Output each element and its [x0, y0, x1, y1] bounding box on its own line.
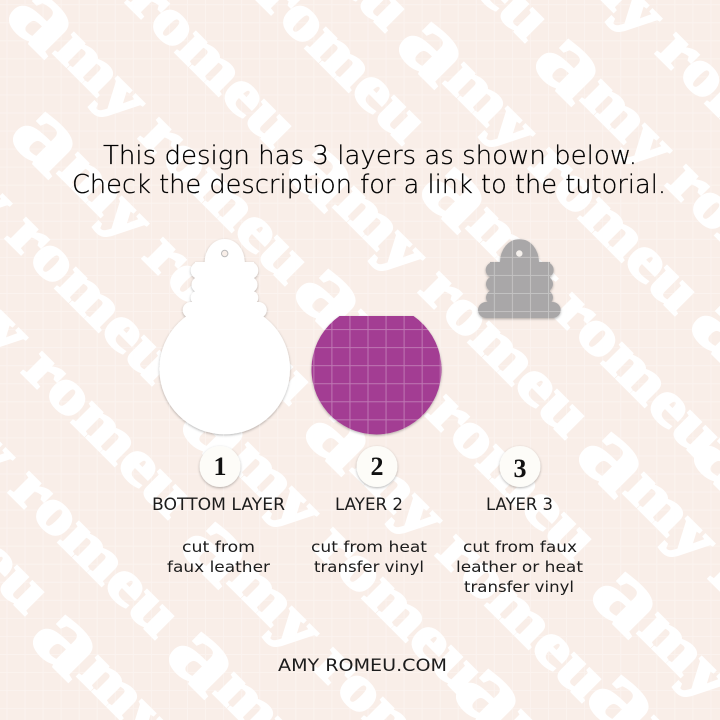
icon: purple layer 2 shape: [312, 316, 442, 434]
footer: website: AMY ROMEU.COM: [278, 656, 447, 675]
watermark pattern: a: [285, 373, 403, 491]
number badge 1: 1: [214, 452, 226, 481]
watermark pattern: a: [558, 396, 676, 514]
watermark pattern: my romeu: [47, 134, 328, 416]
watermark pattern: a: [162, 366, 280, 484]
watermark pattern: my romeu: [456, 189, 720, 471]
description: bottom layer: [167, 538, 271, 576]
watermark pattern: a: [12, 579, 130, 697]
watermark pattern: a: [148, 596, 266, 714]
watermark pattern: a: [162, 486, 280, 604]
number badge 3: 3: [514, 454, 526, 483]
column 1: bottom layer: [152, 446, 285, 576]
number badge 3: [500, 446, 540, 487]
description: layer 2: [311, 538, 427, 576]
description: layer 2: cut from heat: [311, 538, 427, 556]
icon: white bottom layer ornament: [159, 239, 290, 434]
column 2: layer 2: [311, 446, 427, 576]
watermark pattern: my romeu: [43, 14, 324, 296]
watermark pattern: a: [401, 131, 519, 249]
description: layer 3: transfer vinyl: [464, 578, 574, 596]
icon: hole in layer 3: [516, 250, 522, 257]
label: layer 3: LAYER 3: [486, 495, 553, 514]
description: layer 2: transfer vinyl: [314, 558, 424, 576]
description: layer 3: leather or heat: [456, 558, 583, 576]
heading: This design has 3 layers as shown below.: [103, 141, 637, 171]
icon: grey layer 3 shape: [478, 239, 561, 318]
watermark pattern: a: [572, 536, 690, 654]
watermark pattern: my romeu: [330, 291, 611, 573]
watermark pattern: my romeu: [433, 44, 714, 326]
watermark pattern: a: [515, 3, 633, 121]
watermark pattern: my romeu: [340, 431, 621, 713]
watermark pattern: a: [275, 233, 393, 351]
column 3: layer 3: [456, 446, 583, 596]
heading: [72, 141, 666, 200]
watermark pattern: my romeu: [217, 424, 498, 706]
description: layer 3: [456, 538, 583, 596]
watermark pattern: a: [268, 110, 386, 228]
heading: Check the description for a link to the tutorial.: [72, 170, 666, 200]
number badge 2: 2: [370, 452, 384, 481]
description: layer 3: cut from faux: [463, 538, 577, 556]
label: layer 2: LAYER 2: [335, 495, 403, 514]
icon: hole in bottom layer: [222, 250, 228, 257]
watermark pattern: my romeu: [323, 168, 604, 450]
label: bottom layer: BOTTOM LAYER: [152, 495, 285, 514]
description: bottom layer: faux leather: [167, 558, 271, 576]
description: bottom layer: cut from: [182, 538, 255, 556]
